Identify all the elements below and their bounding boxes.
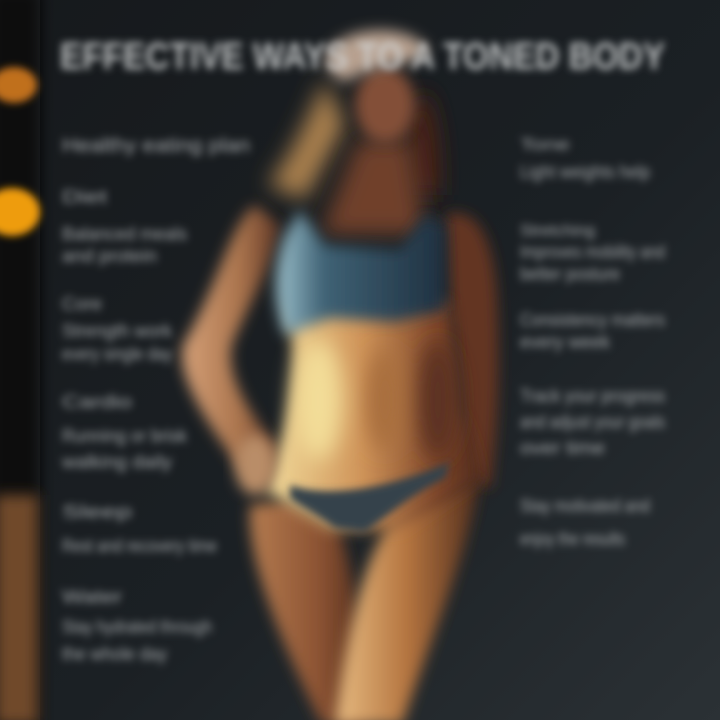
right leg: [335, 475, 480, 720]
hair back: [268, 80, 440, 200]
text block 5: [520, 496, 650, 549]
text block 1: Tone: [520, 135, 570, 154]
text block 2: [62, 294, 173, 364]
hair top: [325, 30, 428, 82]
left leg: [250, 500, 368, 720]
icon: lower orange badge: [0, 188, 40, 236]
text block 4: Track your progress: [520, 386, 665, 406]
text block 2: Stretching: [520, 221, 595, 240]
text block 4: Sleep: [62, 502, 132, 522]
neck and chest: [320, 140, 425, 235]
text block 3: Running or brisk: [62, 426, 188, 446]
text block 3: [520, 310, 665, 352]
text block 4: [62, 502, 217, 556]
text block 1: and protein: [62, 246, 157, 266]
text block 4: Rest and recovery time: [62, 536, 217, 556]
text block 1: [520, 135, 650, 182]
text block 2: Improves mobility and: [520, 242, 665, 262]
text block 3: every week: [520, 332, 611, 352]
text block 2: Strength work: [62, 321, 173, 341]
text block 1: Balanced meals: [62, 224, 187, 244]
text block 1: Healthy eating plan: [62, 135, 250, 157]
text block 4: [520, 386, 665, 458]
text block 3: Cardio: [62, 392, 132, 412]
bikini bottom: [290, 462, 450, 532]
panel: left edge strip: [0, 0, 40, 720]
right arm: [445, 213, 498, 490]
text block 1: Light weights help: [520, 162, 650, 182]
image strip: tan photo: [0, 495, 38, 720]
face: [355, 67, 415, 143]
icon: upper orange badge: [0, 67, 37, 103]
text block 2: better posture: [520, 264, 620, 284]
bikini top: [276, 210, 445, 335]
text block 2: Core: [62, 294, 102, 314]
text block 3: Consistency matters: [520, 310, 665, 330]
text block 5: Water: [62, 587, 122, 607]
torso: [265, 300, 482, 530]
panel: right text column: [520, 135, 665, 549]
text block 4: over time: [520, 438, 605, 458]
text block 5: the whole day: [62, 644, 167, 664]
figure: woman: [182, 30, 498, 720]
hand: [235, 435, 275, 495]
text block 5: [62, 587, 212, 664]
abdomen highlights: [294, 340, 458, 460]
text block 5: Stay hydrated through: [62, 617, 212, 637]
text block 3: walking daily: [61, 452, 172, 472]
text block 2: [520, 221, 665, 284]
text block 5: enjoy the results: [520, 529, 625, 549]
panel: left text column: [61, 135, 250, 664]
text block 2: every single day: [62, 344, 172, 364]
left arm: [182, 205, 280, 485]
text block 1: Diet: [62, 187, 107, 207]
text block 1: [62, 135, 250, 266]
text block 5: Stay motivated and: [520, 496, 650, 516]
text block 4: and adjust your goals: [520, 412, 665, 432]
text block 3: [61, 392, 188, 472]
